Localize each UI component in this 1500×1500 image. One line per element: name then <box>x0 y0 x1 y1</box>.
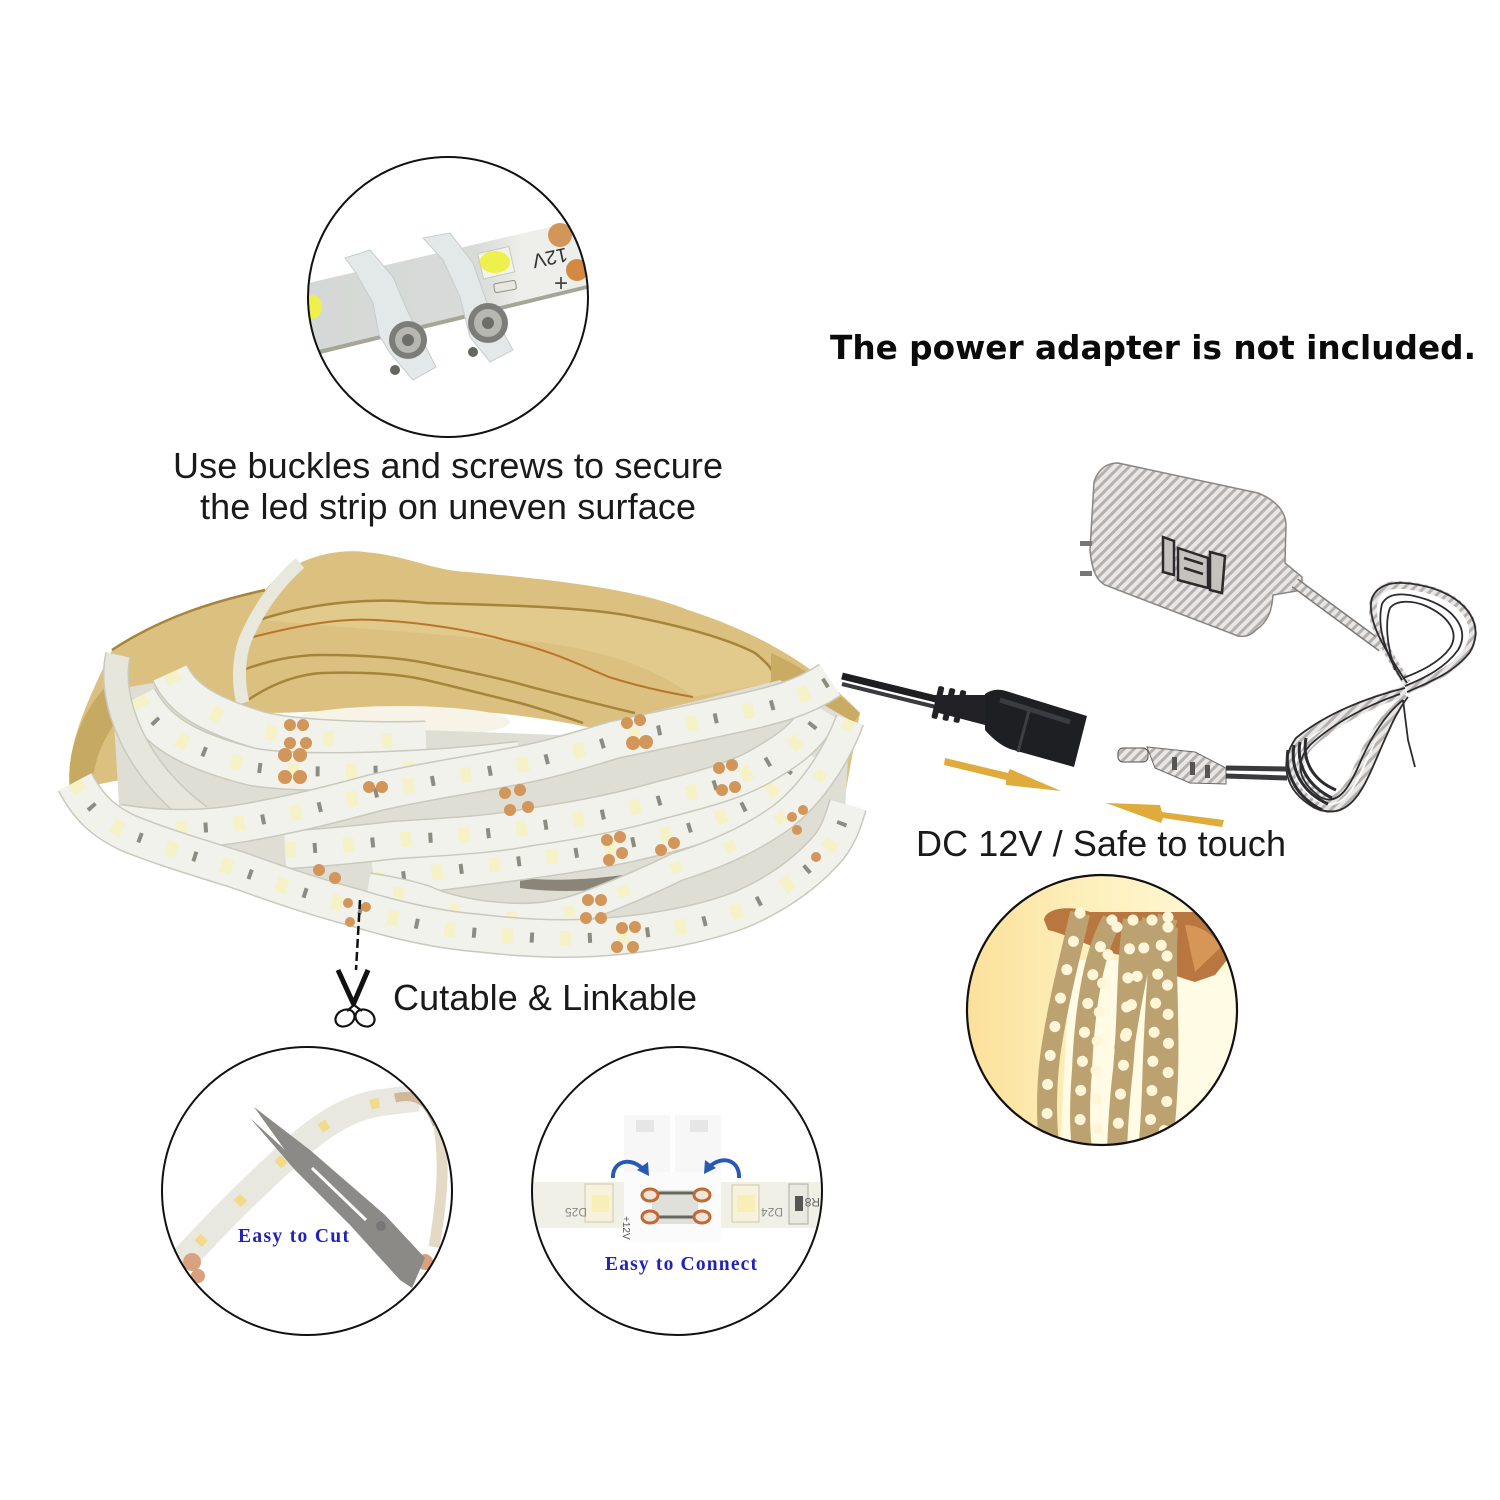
icon: scissors <box>332 970 378 1030</box>
snap connector <box>620 1115 721 1242</box>
front strip <box>75 782 848 938</box>
blue curved arrows <box>613 1160 739 1178</box>
label: easy to connect: Easy to Connect <box>605 1254 758 1275</box>
strip being cut <box>181 1097 442 1283</box>
led strip in buckle circle: + <box>554 270 568 297</box>
panel: easy to cut circle <box>162 1047 452 1335</box>
strip with leds: R8 <box>804 1195 820 1209</box>
hand <box>1044 908 1235 982</box>
text block: dc voltage caption: DC 12V / Safe to touch <box>916 823 1286 864</box>
arrow: right-pointing yellow <box>944 758 1061 791</box>
buckle right <box>423 233 513 362</box>
strip with leds: D25 <box>565 1205 587 1219</box>
led strip in buckle circle: 12V <box>529 243 569 272</box>
rising strip <box>285 710 823 850</box>
arrow: left-pointing yellow <box>1106 803 1224 827</box>
strip with leds: D24 <box>761 1205 783 1219</box>
narrow upright strip <box>239 563 300 703</box>
strip with leds <box>530 1182 825 1228</box>
adapter body <box>1080 463 1302 636</box>
text block: buckles caption: the led strip on uneven surface <box>200 486 696 527</box>
hanging led strips <box>1047 913 1168 1150</box>
label: easy to cut: Easy to Cut <box>238 1226 350 1247</box>
left outer strip <box>116 655 200 817</box>
text block: buckles caption <box>173 445 723 527</box>
strip output cable and female connector <box>842 676 1087 767</box>
infographic canvas <box>58 156 1477 1336</box>
adapter cord coils <box>1286 583 1475 812</box>
long top strip <box>118 680 830 828</box>
power adapter illustration <box>1080 463 1475 812</box>
outer right strip <box>368 720 850 918</box>
panel: easy to connect circle <box>530 1047 825 1335</box>
middle strip right <box>374 750 800 880</box>
dashed cut line <box>356 900 360 970</box>
back strip lower <box>138 697 520 771</box>
text block: cutable caption: Cutable & Linkable <box>393 977 697 1018</box>
copper solder pads <box>278 714 821 953</box>
coil adhesive backing <box>69 551 860 790</box>
panel: buckles and screws circle <box>300 157 595 437</box>
snap connector: +12V <box>620 1216 631 1240</box>
led strip coil <box>69 551 860 953</box>
glow behind strips <box>1060 960 1240 1150</box>
back strip upper <box>170 673 426 741</box>
led strip in buckle circle <box>300 223 595 356</box>
heading: power adapter notice: The power adapter is not included. <box>830 328 1476 367</box>
scissors blades <box>250 1107 425 1288</box>
buckle left <box>345 250 436 380</box>
panel: warm light strips circle <box>960 870 1245 1150</box>
coil white body under strips <box>112 680 850 935</box>
shadow between strips <box>520 845 740 891</box>
adapter dc plug <box>1118 747 1287 784</box>
text block: buckles caption: Use buckles and screws to secure <box>173 445 723 486</box>
